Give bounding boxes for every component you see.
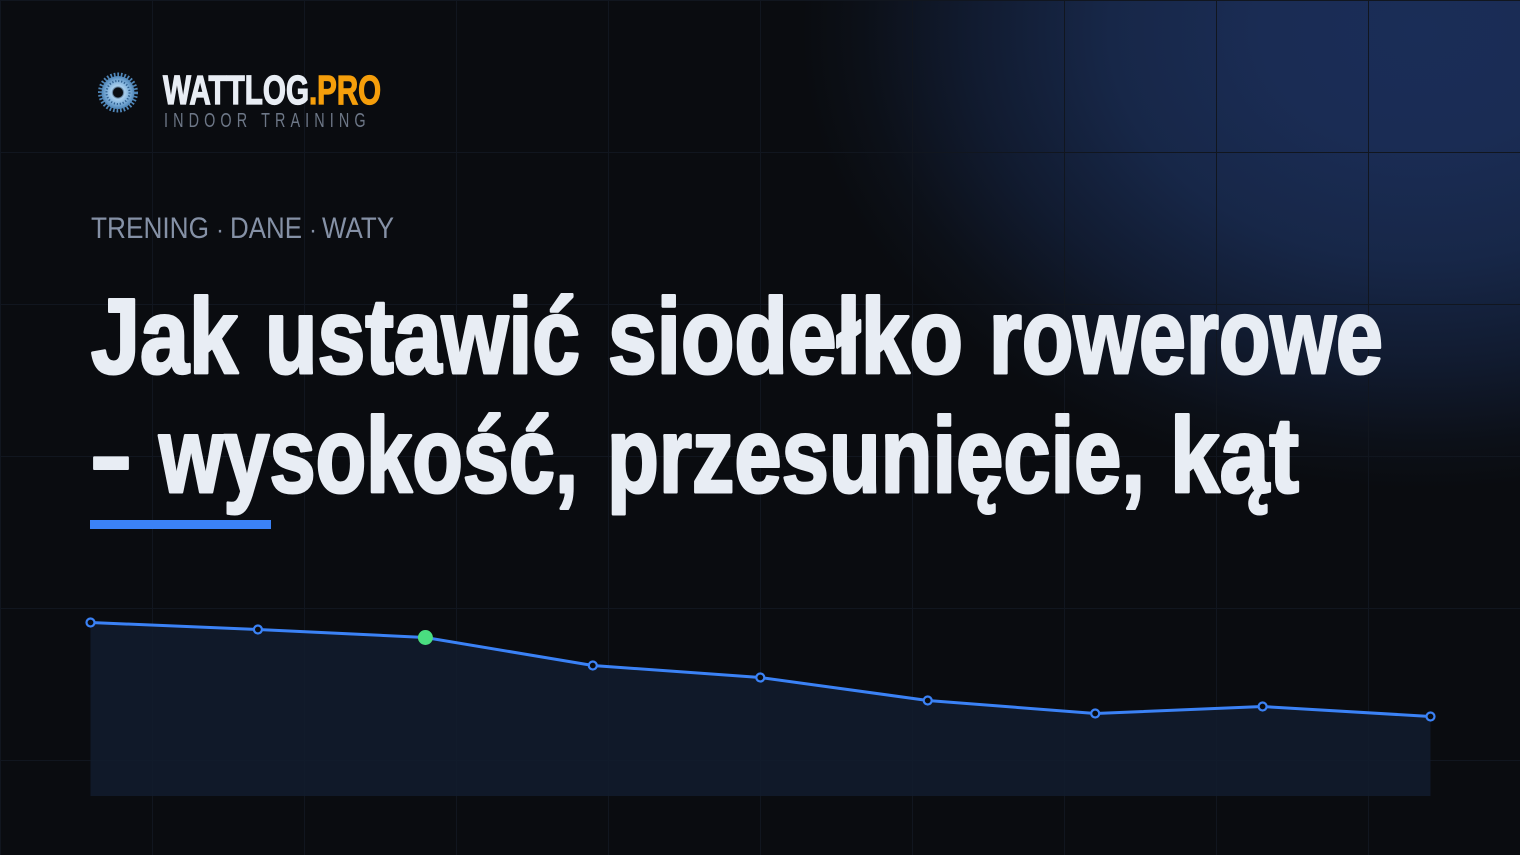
logo: [100, 67, 381, 132]
title: [91, 276, 1383, 515]
kicker: ·: [309, 217, 317, 244]
icon: cassette gear: [100, 74, 136, 110]
title: siodełko: [608, 276, 963, 396]
chart area: [90, 622, 1430, 796]
title: rowerowe: [989, 276, 1383, 396]
data points: [86, 618, 1434, 720]
line chart: [86, 618, 1434, 796]
chart line: [90, 622, 1430, 716]
highlighted data point: [418, 630, 433, 645]
kicker: [91, 212, 394, 245]
title: ustawić: [265, 276, 580, 396]
kicker: ·: [216, 217, 224, 244]
brand name: WATTLOG: [163, 67, 309, 113]
title: –: [92, 395, 130, 515]
kicker: DANE: [230, 212, 302, 245]
kicker: WATY: [322, 212, 394, 245]
title underline: [90, 520, 271, 529]
title: przesunięcie,: [607, 395, 1145, 515]
brand name: .PRO: [309, 67, 381, 113]
kicker: TRENING: [91, 212, 209, 245]
title: kąt: [1170, 395, 1299, 515]
title: wysokość,: [158, 395, 578, 515]
title: Jak: [91, 276, 238, 396]
tagline: INDOOR TRAINING: [164, 109, 366, 132]
